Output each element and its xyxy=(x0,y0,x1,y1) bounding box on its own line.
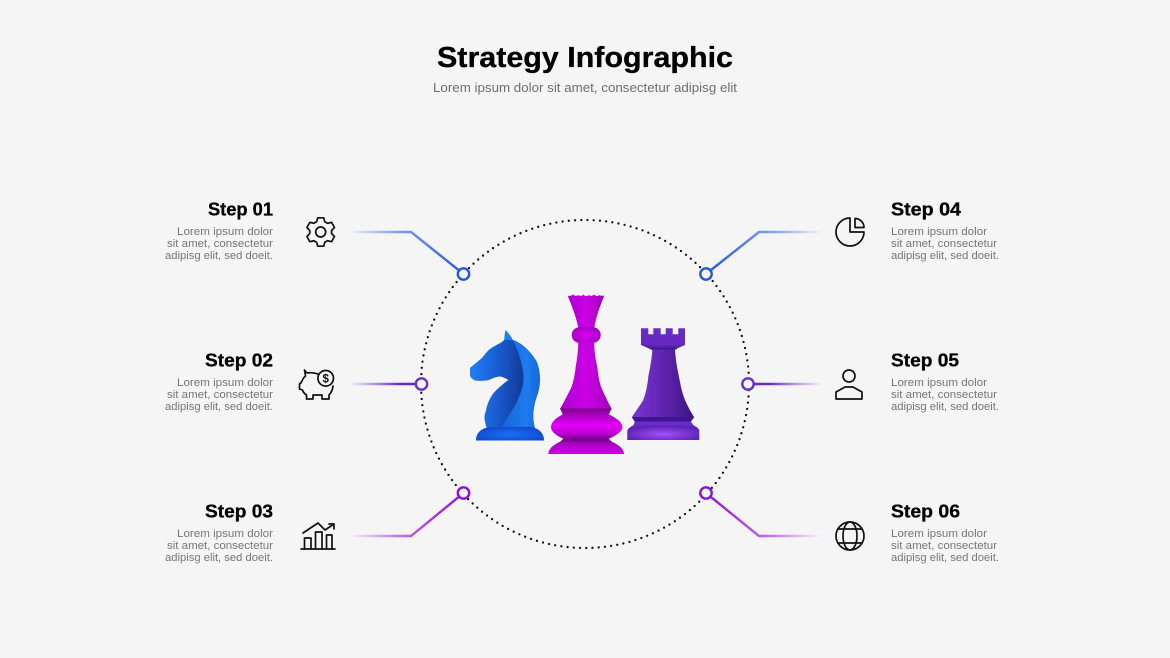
icon: globe xyxy=(836,522,864,550)
step 02 text xyxy=(165,350,273,413)
step 06 text: Lorem ipsum dolor xyxy=(891,528,987,540)
step 03 text: sit amet, consectetur xyxy=(167,540,273,552)
knight xyxy=(470,330,544,440)
icon: piggy bank: $ xyxy=(322,374,329,386)
chess pieces xyxy=(470,294,699,454)
step 01 text: sit amet, consectetur xyxy=(167,238,273,250)
step 01 text: Lorem ipsum dolor xyxy=(177,226,273,238)
icon: bar chart xyxy=(301,523,335,549)
icon: pie chart xyxy=(836,218,864,246)
step 01 text: adipisg elit, sed doeit. xyxy=(165,250,273,262)
step 04 text: Lorem ipsum dolor xyxy=(891,226,987,238)
connector step 03 xyxy=(348,487,469,536)
step 05 text: Lorem ipsum dolor xyxy=(891,377,987,389)
title: Strategy Infographic xyxy=(437,42,733,74)
rook xyxy=(627,328,699,440)
step 02 text: adipisg elit, sed doeit. xyxy=(165,401,273,413)
step 03 text: adipisg elit, sed doeit. xyxy=(165,552,273,564)
step 05 text xyxy=(891,350,999,413)
connector step 04 xyxy=(700,232,822,280)
connector step 05 xyxy=(742,378,822,390)
step 02 text: Step 02 xyxy=(205,350,273,370)
step 05 text: adipisg elit, sed doeit. xyxy=(891,401,999,413)
step 03 text: Lorem ipsum dolor xyxy=(177,528,273,540)
connector step 02 xyxy=(348,378,427,390)
step 04 text: Step 04 xyxy=(891,198,962,220)
step 06 text: adipisg elit, sed doeit. xyxy=(891,552,999,564)
step 01 text: Step 01 xyxy=(208,198,273,220)
step 05 text: Step 05 xyxy=(891,350,959,370)
dotted circle xyxy=(421,220,749,548)
step 05 text: sit amet, consectetur xyxy=(891,389,997,401)
step 06 text: Step 06 xyxy=(891,500,960,522)
icon: gear xyxy=(307,218,334,246)
step 01 text xyxy=(165,198,273,262)
queen xyxy=(548,294,624,454)
step 03 text: Step 03 xyxy=(205,500,273,522)
step 06 text: sit amet, consectetur xyxy=(891,540,997,552)
step 04 text: adipisg elit, sed doeit. xyxy=(891,250,999,262)
step 06 text xyxy=(891,500,999,564)
connector step 06 xyxy=(700,487,822,536)
icon: person xyxy=(836,370,862,399)
step 04 text xyxy=(891,198,999,262)
step 02 text: sit amet, consectetur xyxy=(167,389,273,401)
step 04 text: sit amet, consectetur xyxy=(891,238,997,250)
step 03 text xyxy=(165,500,273,564)
step 02 text: Lorem ipsum dolor xyxy=(177,377,273,389)
connector step 01 xyxy=(348,232,469,280)
subtitle: Lorem ipsum dolor sit amet, consectetur adipisg elit xyxy=(433,81,738,95)
icon: piggy bank xyxy=(300,370,334,399)
